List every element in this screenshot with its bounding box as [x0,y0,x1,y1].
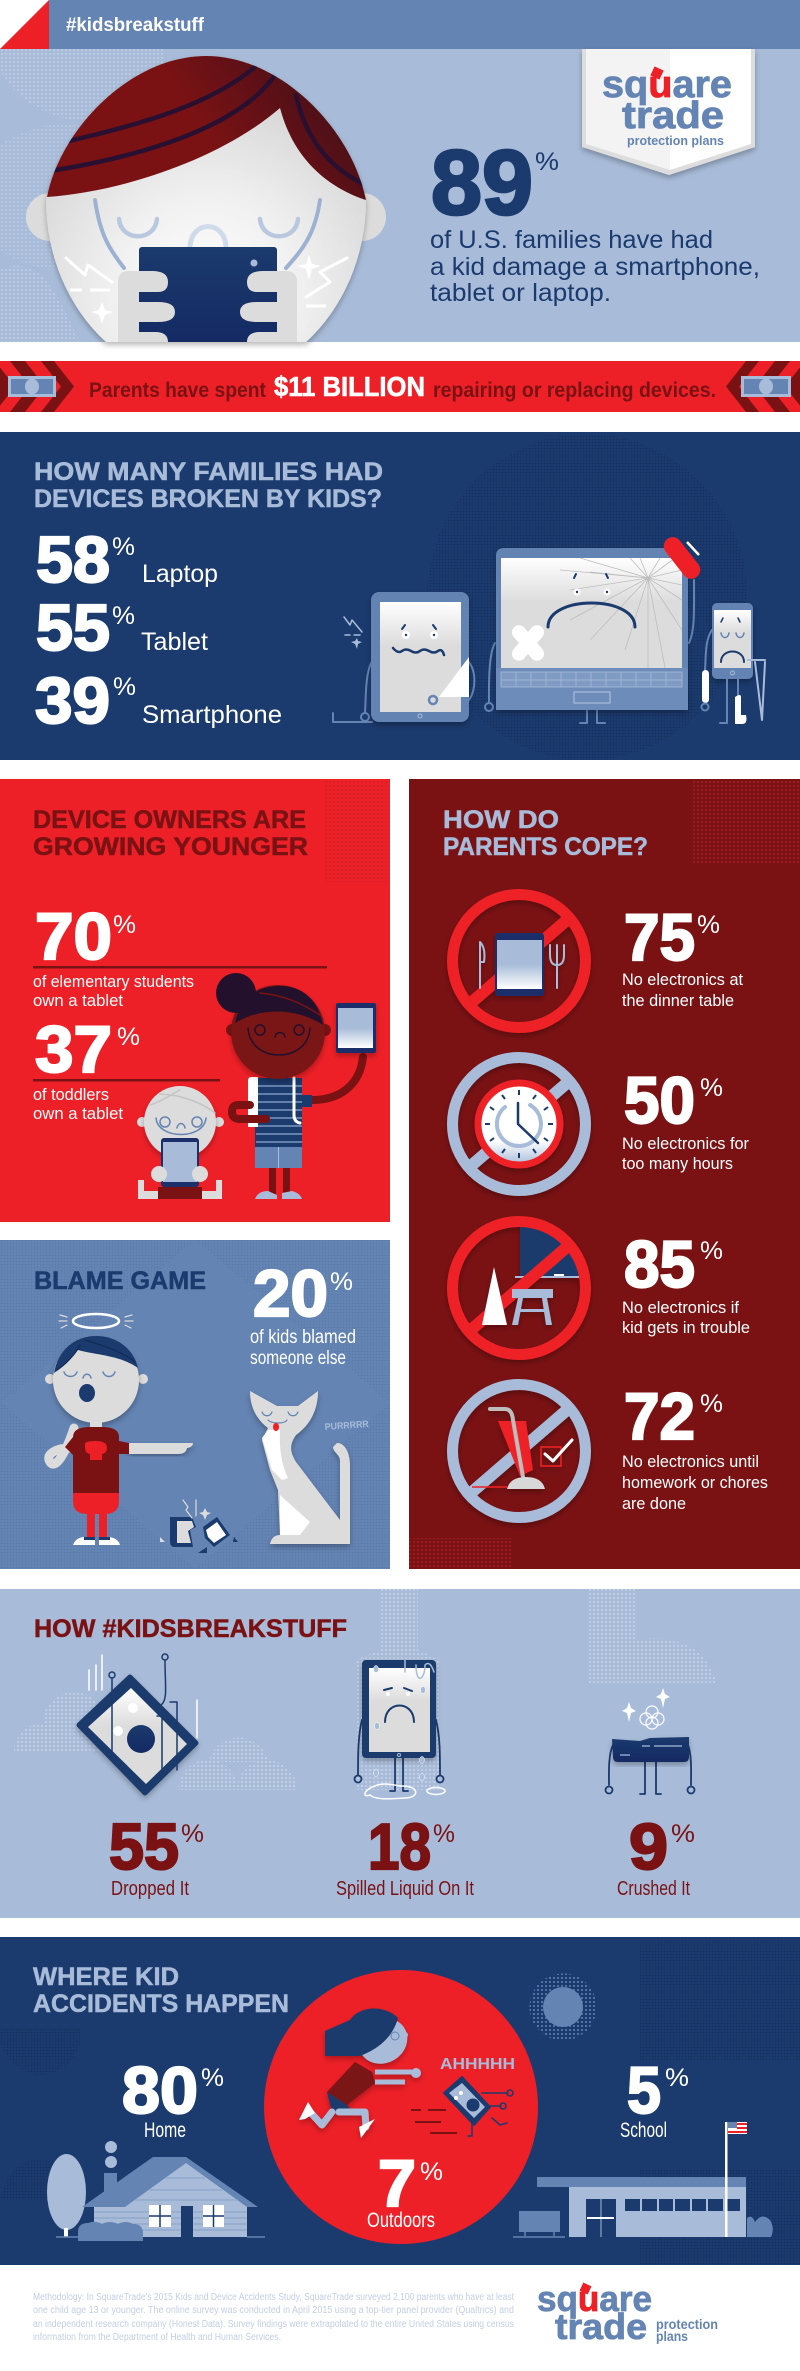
header bar [0,0,800,49]
illustration: runaway phone [411,2077,513,2136]
stat tablet [36,591,208,664]
ribbon text: repairing or replacing devices. [433,379,716,402]
stat 72 percent: No electronics until [622,1452,759,1471]
purr label: PURRRRR [324,1419,369,1433]
stat smartphone: % [113,673,136,701]
logo: trade [555,2306,647,2347]
illustration: school [513,2122,773,2237]
logo [537,2278,718,2347]
stat home [122,2053,224,2142]
illustration: toddler with tablet [137,1086,224,1199]
stat 50 percent: % [700,1074,723,1102]
stat school: School [620,2119,667,2142]
stat spilled [336,1810,474,1900]
stat 72 percent: are done [622,1494,686,1513]
heading [34,458,383,513]
logo badge: trade [622,95,724,137]
illustration: spilled tablet [354,1660,445,1799]
heading: DEVICE OWNERS ARE [33,806,306,834]
circle: outdoors [264,1970,538,2244]
stat 37 percent: own a tablet [33,1104,123,1123]
stat dropped: % [181,1820,204,1848]
stat dropped [109,1810,204,1900]
stat laptop: 58 [36,523,110,596]
heading: GROWING YOUNGER [33,833,308,861]
illustration: injured phone [702,603,765,724]
stat smartphone: Smartphone [142,701,282,729]
stat 72 percent [622,1379,768,1513]
stat 70 percent: % [113,911,136,939]
heading: HOW #KIDSBREAKSTUFF [34,1615,347,1643]
stat 89 percent: a kid damage a smartphone, [430,253,760,281]
stat spilled: % [433,1820,455,1848]
stat 37 percent [33,1012,220,1123]
stat crushed: % [671,1820,695,1848]
icon: skull [85,1441,107,1460]
illustration: running kid [299,2008,421,2138]
stat 85 percent: % [700,1237,723,1265]
stat 89 percent: 89 [431,132,533,234]
stat 20 percent: % [330,1268,353,1296]
panel: hero 89 percent [0,49,800,342]
stat home: % [201,2064,224,2092]
ribbon text [89,371,716,402]
stat 89 percent [430,132,760,307]
stat 85 percent: kid gets in trouble [622,1318,750,1337]
hashtag: #kidsbreakstuff [66,15,205,36]
illustration: dropped tablet [79,1654,197,1793]
icon: dazed scribble [640,1706,664,1729]
stat 85 percent: No electronics if [622,1298,739,1317]
heading: HOW DO [443,806,559,834]
illustration: kid with phone [26,56,386,342]
stat 20 percent: someone else [250,1348,346,1369]
logo badge: square [602,64,732,106]
stat tablet: Tablet [141,628,208,656]
stat 85 percent [622,1227,750,1337]
stat school [620,2053,689,2142]
illustration: girl with tablet [216,973,376,1199]
icon: no electronics at dinner [452,894,586,1028]
panel: how kids break stuff [0,1589,800,1918]
methodology text: Methodology: In SquareTrade's 2015 Kids and Device Accidents Study, SquareTrade surveyed 2,100 parents who have at least [33,2292,514,2303]
stat 20 percent [250,1256,356,1369]
logo badge: protection plans [627,133,724,148]
stat dropped: Dropped It [111,1878,189,1900]
label: AHHHHH: AHHHHH [440,2056,515,2073]
stat crushed: Crushed It [617,1878,690,1900]
stat 89 percent: % [535,148,559,176]
stat 20 percent: of kids blamed [250,1327,356,1348]
ribbon: 11 billion [0,361,800,412]
stat 70 percent: 70 [35,899,112,973]
icon: sun [530,1974,596,2040]
heading: BLAME GAME [34,1267,206,1295]
panel: blame game [0,1240,390,1569]
heading: ACCIDENTS HAPPEN [33,1990,289,2018]
illustration: house [47,2141,265,2241]
methodology text: information from the Department of Health and Human Services. [33,2332,281,2343]
illustration: boy with halo [45,1314,193,1545]
stat outdoors: % [420,2158,443,2186]
icon: crutch [748,660,765,720]
icon: red bandage [660,534,704,582]
ribbon text: Parents have spent [89,379,266,402]
stat 75 percent [622,900,743,1010]
methodology text: an independent research company (Honest Data). Survey findings were extrapolated to the entire United States using census [33,2319,514,2330]
icon: money bill left [8,376,56,397]
stat 75 percent: No electronics at [622,970,743,989]
stat school: 5 [627,2053,661,2127]
stat spilled: Spilled Liquid On It [336,1878,474,1900]
icon: white bandage [509,622,547,664]
illustration: crushed device [606,1688,694,1794]
stat 72 percent: homework or chores [622,1473,768,1492]
stat crushed: 9 [629,1810,668,1883]
stat outdoors: 7 [378,2146,416,2220]
stat 75 percent: the dinner table [622,991,734,1010]
ribbon text: $11 BILLION [274,371,425,402]
icon: flag [725,2122,747,2237]
stat home: 80 [122,2053,198,2127]
stat 50 percent: No electronics for [622,1134,749,1153]
stat laptop: Laptop [142,560,218,588]
illustration: broken phone [160,1500,238,1553]
heading: WHERE KID [33,1963,179,1991]
stat outdoors: Outdoors [367,2209,435,2232]
stat 89 percent: tablet or laptop. [430,279,611,307]
heading: PARENTS COPE? [443,833,648,861]
hair [47,56,366,200]
stat smartphone [35,664,282,737]
stat home: Home [144,2119,186,2142]
panel: where accidents happen [0,1937,800,2265]
heading [33,1963,289,2018]
stat 89 percent: of U.S. families have had [430,226,713,254]
stat outdoors [367,2146,443,2232]
stat school: % [665,2064,689,2092]
stat 72 percent: 72 [624,1379,695,1453]
stat crushed [617,1810,695,1900]
heading [33,806,308,861]
heading: HOW MANY FAMILIES HAD [34,458,383,486]
stat 50 percent: too many hours [622,1154,733,1173]
stat spilled: 18 [368,1810,431,1883]
hands [118,271,175,342]
stat tablet: 55 [36,591,110,664]
icon: no electronics if kid in trouble [452,1222,586,1354]
stat 72 percent: % [700,1390,723,1418]
stat dropped: 55 [109,1810,179,1883]
logo: square [537,2278,652,2319]
logo: protection [656,2316,718,2332]
illustration: cat [250,1391,369,1544]
stat 70 percent: own a tablet [33,991,123,1010]
logo: plans [656,2328,688,2344]
stat 50 percent: 50 [624,1063,695,1137]
heading: DEVICES BROKEN BY KIDS? [34,485,382,513]
stat 70 percent [33,899,327,1010]
stat 50 percent [622,1063,749,1173]
stat 70 percent: of elementary students [33,972,194,991]
logo badge [582,49,755,175]
stat 85 percent: 85 [624,1227,695,1301]
stat 37 percent: 37 [35,1012,112,1086]
icon: no electronics for too many hours [452,1058,586,1190]
panel: footer [0,2265,800,2371]
heading [443,806,648,861]
methodology text [33,2292,514,2343]
panel: how do parents cope [409,779,800,1569]
stat laptop [36,523,218,596]
illustration: broken tablet [333,592,474,722]
stat tablet: % [112,602,135,630]
stat 37 percent: % [117,1023,140,1051]
stat 20 percent: 20 [253,1256,328,1330]
stat 75 percent: % [697,911,720,939]
stat 75 percent: 75 [624,900,695,974]
icon: no electronics until chores done [452,1384,586,1518]
stat 37 percent: of toddlers [33,1085,109,1104]
icon: money bill right [741,376,791,397]
illustration: broken laptop [485,534,704,723]
stat smartphone: 39 [35,664,110,737]
stat laptop: % [112,533,135,561]
panel: how many families [0,432,800,760]
methodology text: one child age 13 or younger. The online survey was conducted in April 2015 using a top-tier panel provider (Qualtrics) and [33,2305,514,2316]
panel: device owners [0,779,390,1222]
